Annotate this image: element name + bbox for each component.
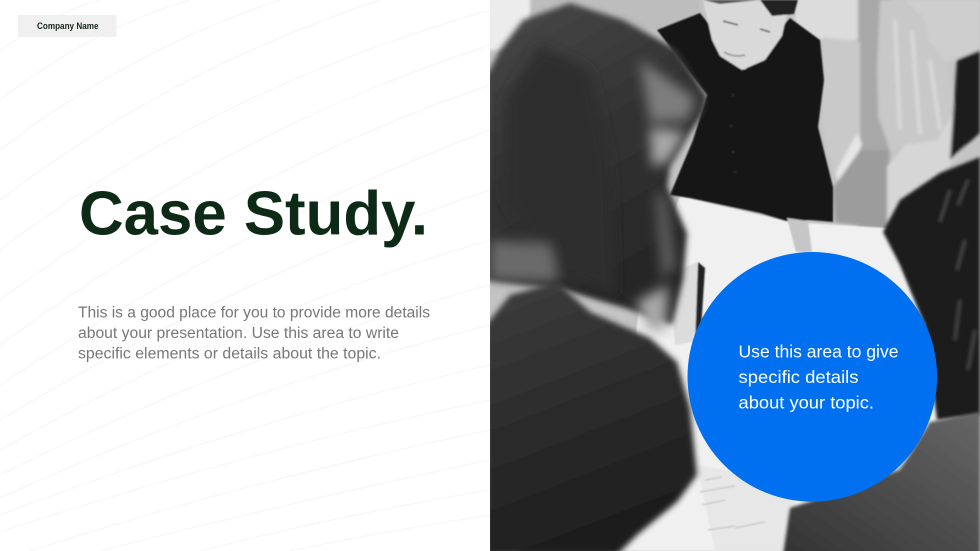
center woman — [657, 0, 833, 252]
background pattern: fan of faint curves — [0, 0, 490, 551]
photo: team gathered around a table, black and white — [480, 0, 980, 551]
callout text: about your topic. — [738, 392, 874, 412]
description text block: about your presentation. Use this area to write — [78, 325, 399, 342]
callout text: Use this area to give — [738, 342, 898, 362]
callout text — [738, 342, 898, 412]
foreground left woman: hair — [486, 3, 707, 325]
label: company name: Company Name — [37, 21, 98, 31]
right woman with blonde hair — [877, 0, 980, 223]
description text block: specific elements or details about the topic. — [78, 346, 381, 362]
description text block: This is a good place for you to provide more details — [78, 304, 430, 322]
table — [610, 196, 960, 551]
photo background wall and chair — [480, 0, 890, 235]
foreground left woman: dark top — [486, 282, 697, 551]
callout text: specific details — [738, 367, 859, 387]
callout circle — [688, 252, 937, 502]
paper notes and tablet on table — [670, 262, 800, 551]
description text block — [78, 304, 430, 362]
hair shading and highlights — [490, 45, 695, 332]
title: Case Study. — [79, 180, 428, 248]
foreground right person: shoulder — [783, 412, 980, 551]
label: company name — [18, 15, 116, 37]
foreground right person: dark curly hair — [883, 157, 980, 420]
